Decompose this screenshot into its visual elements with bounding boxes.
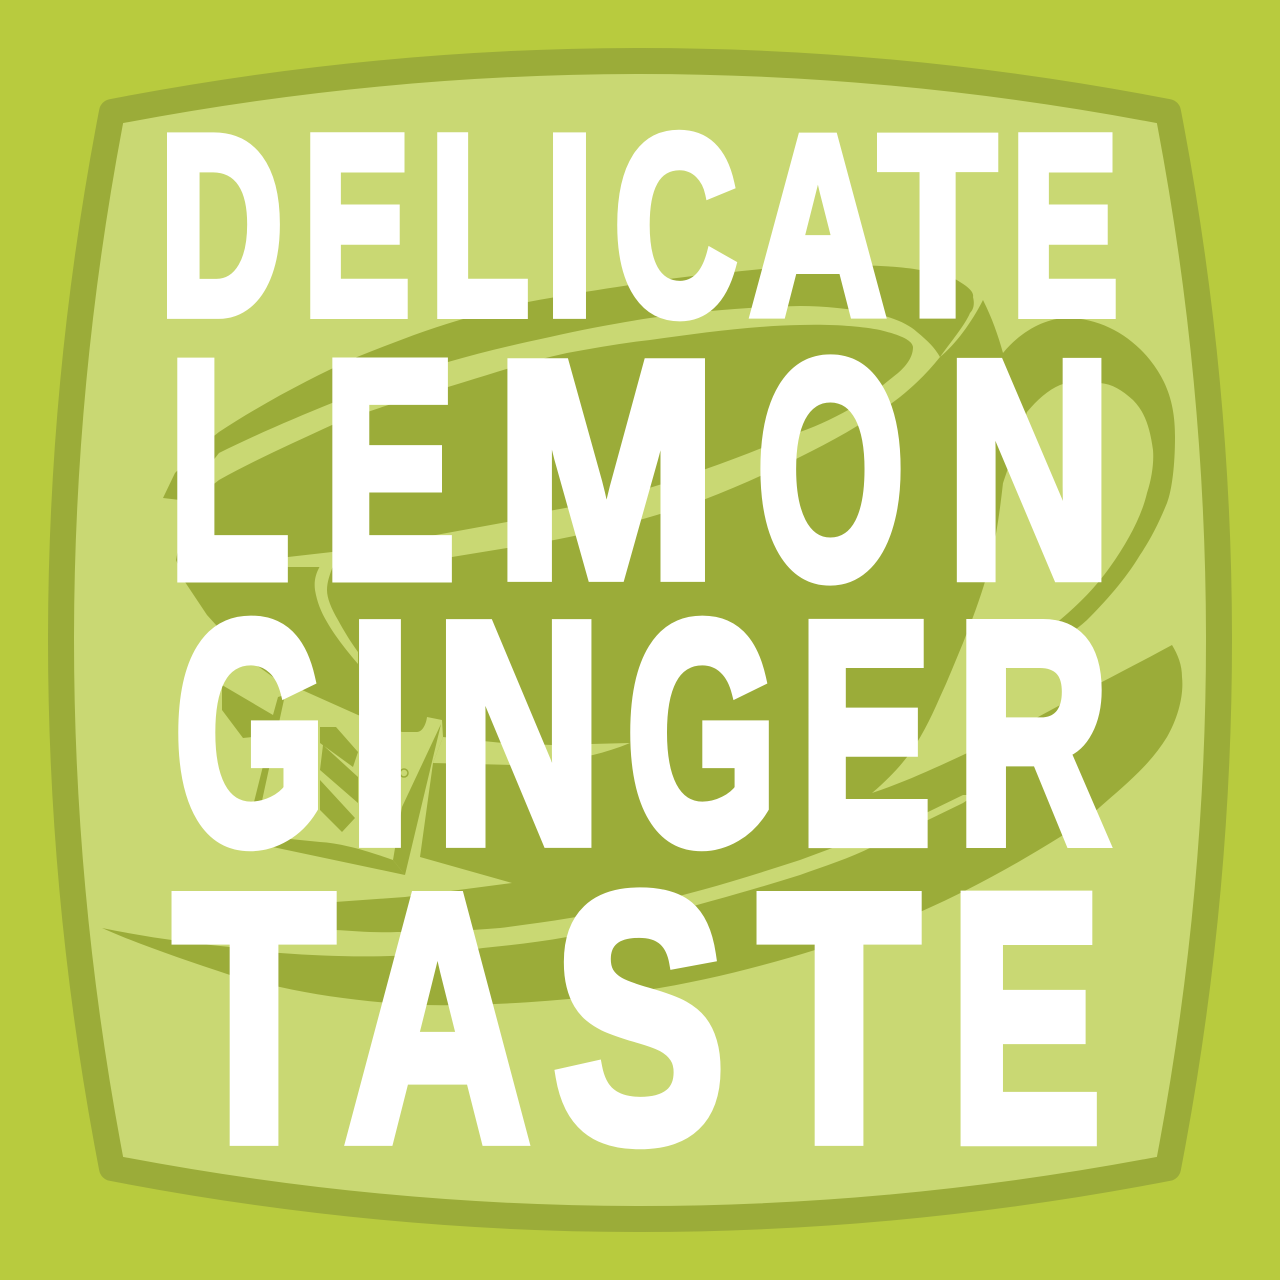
line: DELICATE: E <box>1011 85 1118 368</box>
line: GINGER: G <box>627 558 776 907</box>
line: DELICATE: L <box>430 84 529 368</box>
line: TASTE: T <box>759 824 919 1213</box>
line: LEMON <box>168 297 1112 642</box>
line: GINGER: N <box>436 560 602 908</box>
line: TASTE <box>174 822 1101 1213</box>
cup side highlight <box>315 566 358 664</box>
line: GINGER: R <box>957 559 1108 908</box>
line: DELICATE: D <box>160 83 283 367</box>
line: LEMON: O <box>757 298 905 642</box>
line: GINGER: E <box>800 560 931 908</box>
tag right fold <box>393 724 441 875</box>
line: DELICATE: T <box>879 83 996 367</box>
string highlight <box>433 737 630 765</box>
teabag tag <box>222 685 441 875</box>
icon: teacup and saucer <box>102 265 1182 1005</box>
line: DELICATE: C <box>614 83 737 367</box>
line: TASTE: T <box>174 824 334 1213</box>
line: LEMON: L <box>168 297 290 641</box>
line: DELICATE: E <box>303 85 410 368</box>
cup body, rim ring and saucer <box>102 265 1182 1005</box>
line: DELICATE: A <box>750 85 886 368</box>
line: LEMON: M <box>495 299 718 642</box>
line: TASTE: A <box>346 822 529 1213</box>
tag left border <box>222 685 285 847</box>
line: LEMON: E <box>323 298 455 641</box>
line: TASTE: E <box>950 824 1101 1213</box>
line: LEMON: N <box>946 297 1112 642</box>
tag stripes <box>320 727 358 832</box>
line: DELICATE <box>160 83 1118 368</box>
line: GINGER <box>175 558 1108 908</box>
cup handle <box>975 318 1175 675</box>
tea surface <box>200 325 913 560</box>
tag bottom border <box>268 838 405 875</box>
line: DELICATE: I <box>545 84 594 368</box>
title <box>160 83 1118 1213</box>
registered mark <box>400 769 408 777</box>
line: GINGER: G <box>175 560 326 908</box>
line: GINGER: I <box>349 560 411 908</box>
rim highlight band <box>190 306 940 567</box>
line: TASTE: S <box>554 822 725 1212</box>
